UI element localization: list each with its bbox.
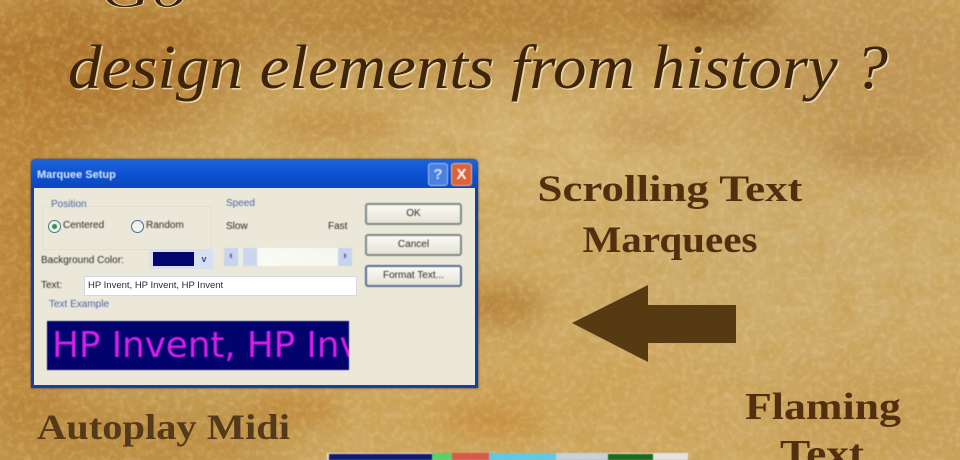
bottom clipped toolbar strip <box>327 453 688 460</box>
slider thumb <box>243 248 257 266</box>
navy segment <box>329 454 432 460</box>
fast label: Fast <box>328 221 347 232</box>
heading: autoplay midi: Autoplay Midi <box>37 407 290 447</box>
text input <box>84 276 357 296</box>
title: design elements from history: design elements from history ? <box>68 34 888 102</box>
text example label: Text Example <box>49 299 109 310</box>
heading: flaming text: Flaming <box>745 386 901 428</box>
help button <box>428 163 448 186</box>
close button <box>451 163 472 186</box>
position label: Position <box>51 199 87 210</box>
dropdown arrow: v <box>201 254 206 264</box>
slow label: Slow <box>226 221 248 232</box>
heading: scrolling text marquees: Marquees <box>582 220 757 261</box>
navy color swatch <box>153 252 194 266</box>
heading: scrolling text marquees: Scrolling Text <box>538 169 803 210</box>
close button: X <box>456 166 466 183</box>
grey segment <box>556 453 608 460</box>
green segment <box>432 453 452 460</box>
group: position <box>42 206 212 250</box>
red segment <box>452 453 489 460</box>
heading: flaming text <box>745 386 901 460</box>
title: design elements from history: design elements from history ? <box>70 36 890 104</box>
OK button <box>365 203 462 225</box>
Cancel button: Cancel <box>398 239 429 250</box>
cyan segment <box>489 453 556 460</box>
background color dropdown <box>149 249 213 269</box>
dark green segment <box>608 454 653 460</box>
background color label: Background Color: <box>41 255 124 266</box>
Format Text button <box>365 265 462 287</box>
heading: scrolling text marquees <box>538 169 803 261</box>
speed label: Speed <box>226 198 255 209</box>
text example preview <box>47 321 349 370</box>
dialog title text: Marquee Setup <box>37 169 116 181</box>
text input: HP Invent, HP Invent, HP Invent <box>88 280 223 291</box>
arrow pointing left <box>572 285 736 362</box>
centered label: Centered <box>63 220 104 231</box>
help button: ? <box>433 166 443 183</box>
OK button: OK <box>406 208 421 219</box>
Format Text button: Format Text... <box>383 270 444 281</box>
slider right arrow <box>338 248 352 266</box>
random label: Random <box>146 220 184 231</box>
dialog title bar <box>31 159 478 188</box>
text label: Text: <box>41 280 62 291</box>
slider left arrow: ‹ <box>229 250 233 262</box>
slider left arrow <box>224 248 238 266</box>
radio: centered <box>48 220 61 233</box>
Cancel button <box>365 234 462 256</box>
radio: random <box>131 220 144 233</box>
speed slider <box>224 248 352 266</box>
slider right arrow: › <box>343 250 347 262</box>
group: speed <box>224 198 352 266</box>
dialog window: Marquee Setup <box>31 159 478 388</box>
